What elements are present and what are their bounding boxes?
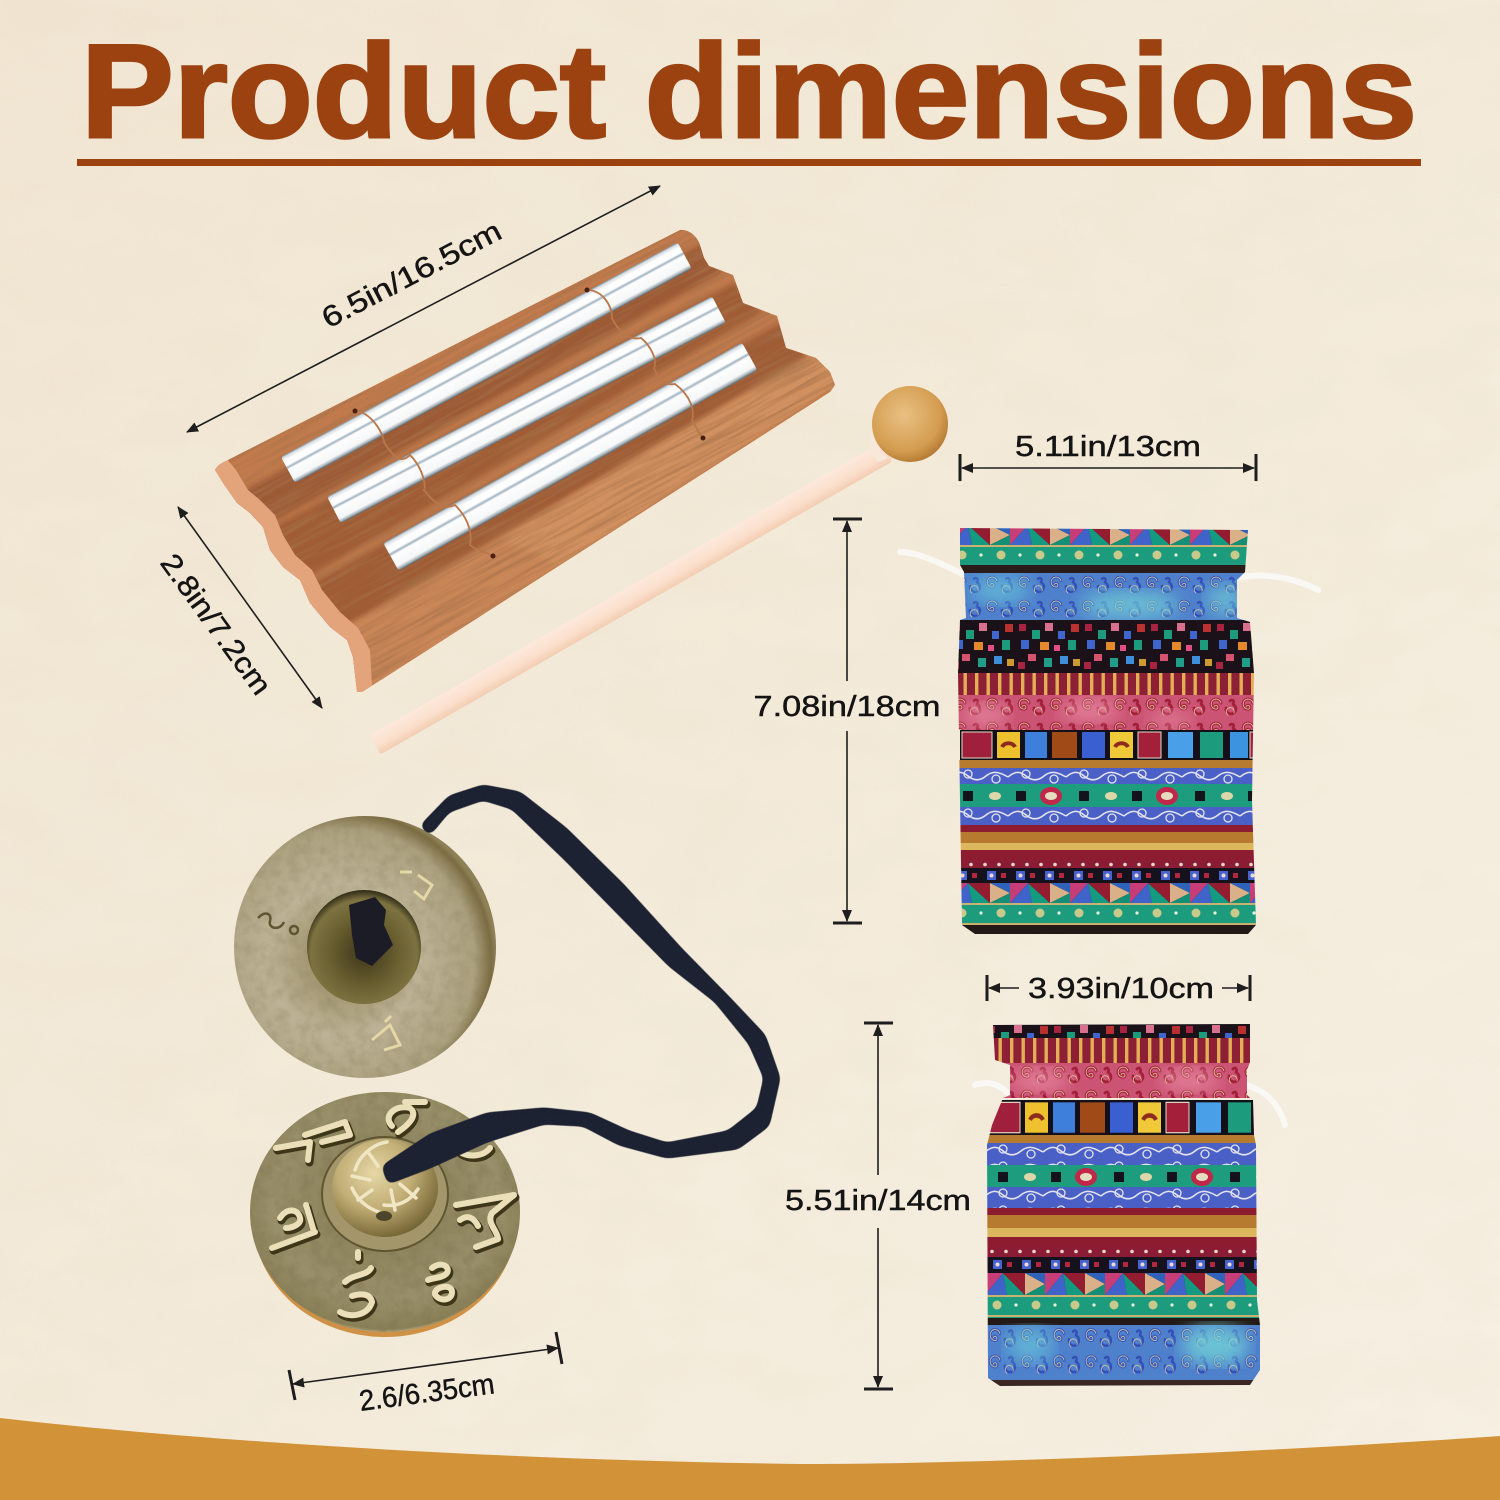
title underline	[77, 159, 1421, 166]
dimension: chime width: 2.8in/7.2cm	[154, 548, 277, 701]
chime rods	[281, 242, 758, 571]
pouch fabric	[985, 1022, 1270, 1388]
dimension: chime width	[154, 507, 322, 708]
copper wires	[355, 290, 703, 556]
drawstrings	[975, 1083, 1285, 1125]
leather strap	[382, 785, 780, 1184]
dimension: small pouch height	[785, 1023, 971, 1389]
wood block	[215, 230, 835, 692]
dimension: large pouch width	[960, 431, 1256, 481]
product: tingsha cymbals	[230, 785, 780, 1337]
dimension: large pouch height: 7.08in/18cm	[754, 691, 940, 723]
wire pins	[352, 288, 706, 558]
upper cymbal	[230, 810, 500, 1085]
product: large drawstring pouch	[900, 525, 1318, 935]
dimension: chime length	[187, 186, 660, 432]
dimension: cymbal diameter: 2.6/6.35cm	[357, 1368, 496, 1418]
dimension: large pouch width: 5.11in/13cm	[1015, 431, 1201, 463]
drawstrings	[900, 552, 1318, 590]
pouch fabric	[950, 525, 1270, 935]
dimension: cymbal diameter	[289, 1332, 562, 1418]
dimension: small pouch height: 5.51in/14cm	[785, 1185, 971, 1217]
lower cymbal	[248, 1090, 523, 1337]
product: wooden chime block with mallet	[215, 230, 948, 754]
dimension: chime length: 6.5in/16.5cm	[317, 215, 507, 335]
mallet	[370, 386, 948, 755]
relief motifs: shadow	[274, 1104, 516, 1318]
dimension: large pouch height	[754, 519, 940, 923]
product: small drawstring pouch	[975, 1022, 1285, 1388]
title: Product dimensions	[81, 18, 1417, 166]
bottom orange band	[0, 1418, 1500, 1500]
dimension: small pouch width: 3.93in/10cm	[1028, 973, 1214, 1005]
dimension: small pouch width	[987, 973, 1250, 1005]
dome lotus	[352, 1142, 418, 1214]
relief motifs: highlight	[272, 1102, 514, 1315]
